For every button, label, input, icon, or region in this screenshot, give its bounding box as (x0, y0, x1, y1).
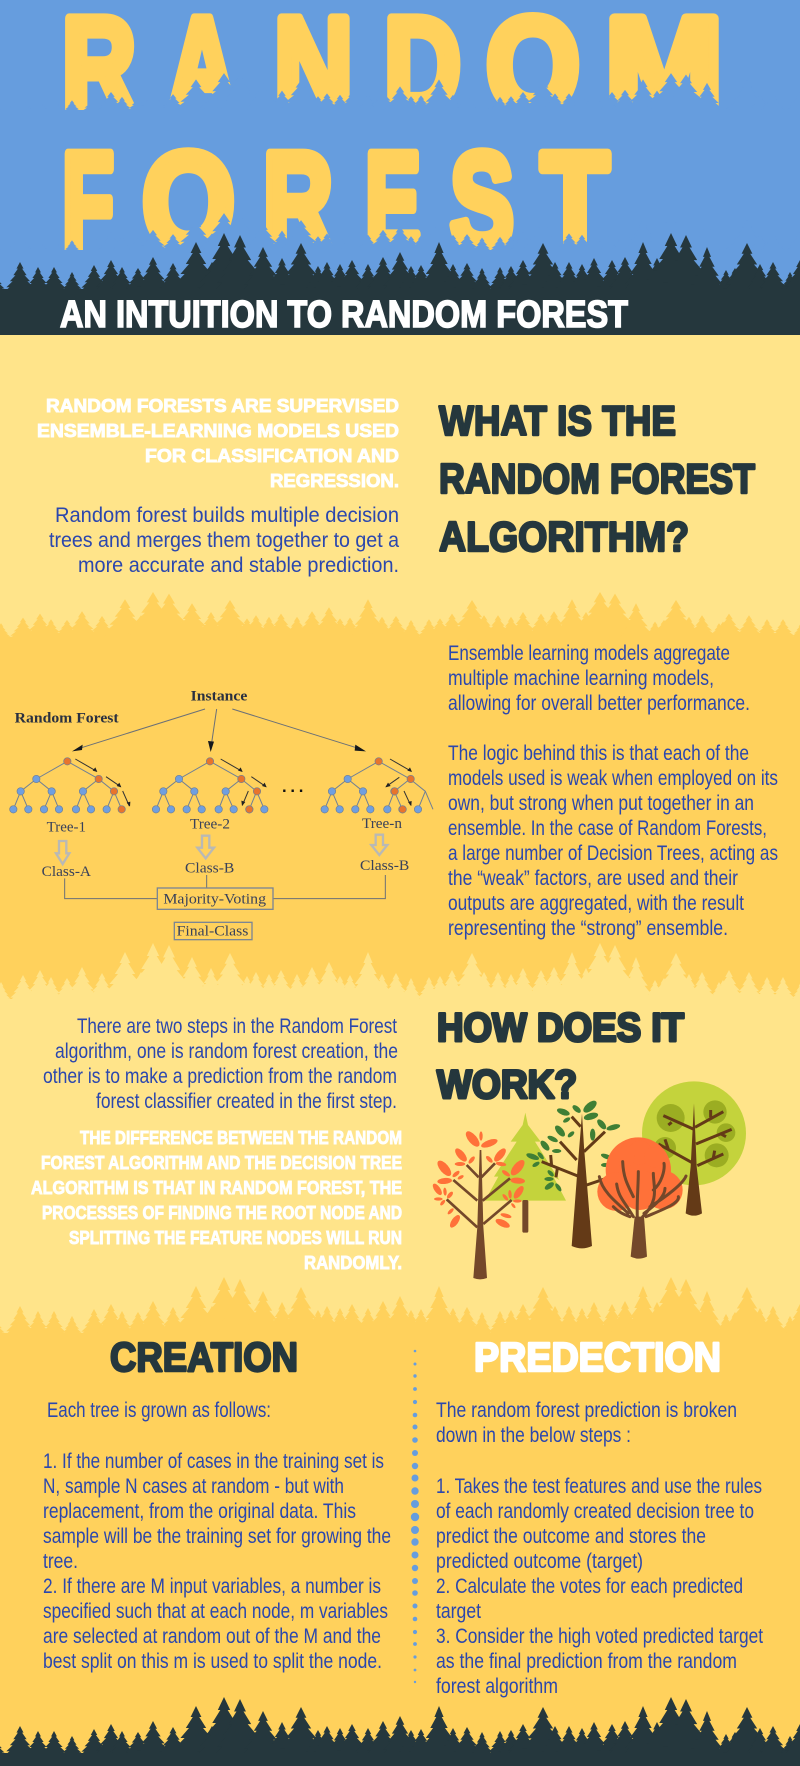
creation steps text: specified such that at each node, m variables (43, 1600, 388, 1623)
icon: conifer (485, 1113, 566, 1233)
title line: FOREST: S (450, 123, 514, 280)
how it works intro text (43, 1015, 398, 1113)
tree n (321, 758, 433, 813)
title line: RANDOM (62, 0, 723, 141)
diagram labels top: Random Forest (15, 711, 119, 727)
white difference text: THE DIFFERENCE BETWEEN THE RANDOM (80, 1127, 402, 1148)
prediction steps text: forest algorithm (436, 1675, 558, 1698)
title line: FOREST: T (541, 123, 609, 280)
tree and class labels: Tree-2 (190, 817, 230, 833)
tree 2 (152, 758, 268, 813)
creation steps text (43, 1399, 391, 1673)
subtitle: AN INTUITION TO RANDOM FOREST (60, 294, 628, 336)
majority voting box (157, 888, 273, 909)
tree and class labels: Class-B (360, 858, 410, 874)
white difference text: FOREST ALGORITHM AND THE DECISION TREE (41, 1152, 402, 1173)
icon: tall green-leaf tree (525, 1098, 621, 1248)
heading: how does it work (437, 1006, 684, 1107)
bottom dark treeline (0, 1697, 800, 1766)
icon: orange bush tree (597, 1137, 686, 1259)
creation steps text: are selected at random out of the M and the (43, 1625, 381, 1648)
ensemble explanation text (448, 642, 778, 940)
title line: FOREST: R (263, 123, 333, 280)
prediction steps text: predicted outcome (target) (436, 1550, 643, 1573)
tree and class labels (42, 816, 410, 880)
majority voting box: Majority-Voting (163, 891, 267, 907)
prediction steps text: as the final prediction from the random (436, 1650, 737, 1673)
diagram labels top (15, 689, 248, 727)
white difference text (31, 1127, 402, 1273)
white difference text: ALGORITHM IS THAT IN RANDOM FOREST, THE (31, 1177, 402, 1198)
ensemble explanation text: representing the “strong” ensemble. (448, 917, 728, 940)
icon: orange-leaf tree (431, 1129, 527, 1279)
heading: how does it work: WORK? (437, 1063, 577, 1107)
prediction steps text (436, 1399, 763, 1698)
prediction steps text: predict the outcome and stores the (436, 1525, 706, 1548)
blue definition text: Random forest builds multiple decision (55, 504, 399, 527)
heading: creation: CREATION (110, 1334, 298, 1380)
tree and class labels: Tree-n (362, 816, 403, 832)
title line: FOREST: O (142, 123, 235, 280)
creation steps text: tree. (43, 1550, 78, 1573)
how it works intro text: other is to make a prediction from the random (43, 1065, 397, 1088)
blue definition text: trees and merges them together to get a (49, 529, 399, 552)
panel: creation and prediction background (0, 1277, 800, 1766)
heading: what is the random forest algorithm: RANDOM FOREST (439, 455, 755, 502)
white definition text: FOR CLASSIFICATION AND (145, 445, 399, 466)
white difference text: SPLITTING THE FEATURE NODES WILL RUN (69, 1227, 402, 1248)
panel: how does it work background (0, 943, 800, 1766)
heading: what is the random forest algorithm (439, 397, 755, 560)
tree 1 (10, 758, 130, 813)
how it works intro text: There are two steps in the Random Forest (77, 1015, 397, 1038)
creation steps text: N, sample N cases at random - but with (43, 1475, 344, 1498)
icon: round green tree (642, 1081, 746, 1216)
white difference text: RANDOMLY. (304, 1252, 402, 1273)
diagram: random forest flow (10, 689, 433, 940)
sky background (0, 0, 800, 340)
tree cut-out on FOREST letters (0, 213, 800, 290)
prediction steps text: down in the below steps : (436, 1424, 631, 1447)
diagram labels top: Instance (191, 689, 248, 705)
white definition text: ENSEMBLE-LEARNING MODELS USED (37, 420, 399, 441)
ensemble explanation text: multiple machine learning models, (448, 667, 714, 690)
heading: how does it work: HOW DOES IT (437, 1006, 684, 1050)
ensemble explanation text: outputs are aggregated, with the result (448, 892, 744, 915)
creation steps text: Each tree is grown as follows: (47, 1399, 271, 1422)
white definition text: RANDOM FORESTS ARE SUPERVISED (46, 395, 399, 416)
illustration: group of trees (431, 1081, 746, 1279)
final class box: Final-Class (177, 923, 249, 939)
title line: FOREST: F (62, 123, 114, 280)
heading: what is the random forest algorithm: ALGORITHM? (439, 513, 689, 560)
white difference text: PROCESSES OF FINDING THE ROOT NODE AND (42, 1202, 402, 1223)
heading: prediction: PREDECTION (474, 1334, 721, 1380)
white definition text (37, 395, 399, 491)
dotted divider (411, 1350, 419, 1683)
how it works intro text: algorithm, one is random forest creation, the (55, 1040, 398, 1063)
tree and class labels: Class-A (42, 864, 91, 880)
tree and class labels: Tree-1 (47, 820, 86, 836)
ensemble explanation text: Ensemble learning models aggregate (448, 642, 730, 665)
creation steps text: replacement, from the original data. This (43, 1500, 356, 1523)
heading: what is the random forest algorithm: WHAT IS THE (439, 397, 676, 444)
panel: ensemble section background (0, 592, 800, 1766)
ellipsis between trees: ... (282, 777, 303, 796)
arrows from instance (72, 709, 366, 752)
dark treeline header band (0, 233, 800, 335)
blue definition text: more accurate and stable prediction. (78, 554, 399, 577)
creation steps text: 1. If the number of cases in the training set is (43, 1450, 384, 1473)
creation steps text: 2. If there are M input variables, a number is (43, 1575, 381, 1598)
tree and class labels: Class-B (185, 860, 235, 876)
title line: FOREST: E (365, 123, 421, 280)
creation steps text: sample will be the training set for growing the (43, 1525, 391, 1548)
white definition text: REGRESSION. (270, 470, 399, 491)
how it works intro text: forest classifier created in the first step. (96, 1090, 397, 1113)
blue definition text (49, 504, 399, 577)
prediction steps text: The random forest prediction is broken (436, 1399, 737, 1422)
creation steps text: best split on this m is used to split the node. (43, 1650, 382, 1673)
prediction steps text: target (436, 1600, 481, 1623)
voting connectors (65, 875, 385, 899)
tree cut-out on RANDOM letters (0, 73, 800, 140)
title line: FOREST (62, 123, 609, 280)
title: RANDOM FOREST (62, 0, 723, 280)
ensemble explanation text: the “weak” factors, are used and their (448, 867, 738, 890)
hollow down arrows (56, 835, 387, 864)
